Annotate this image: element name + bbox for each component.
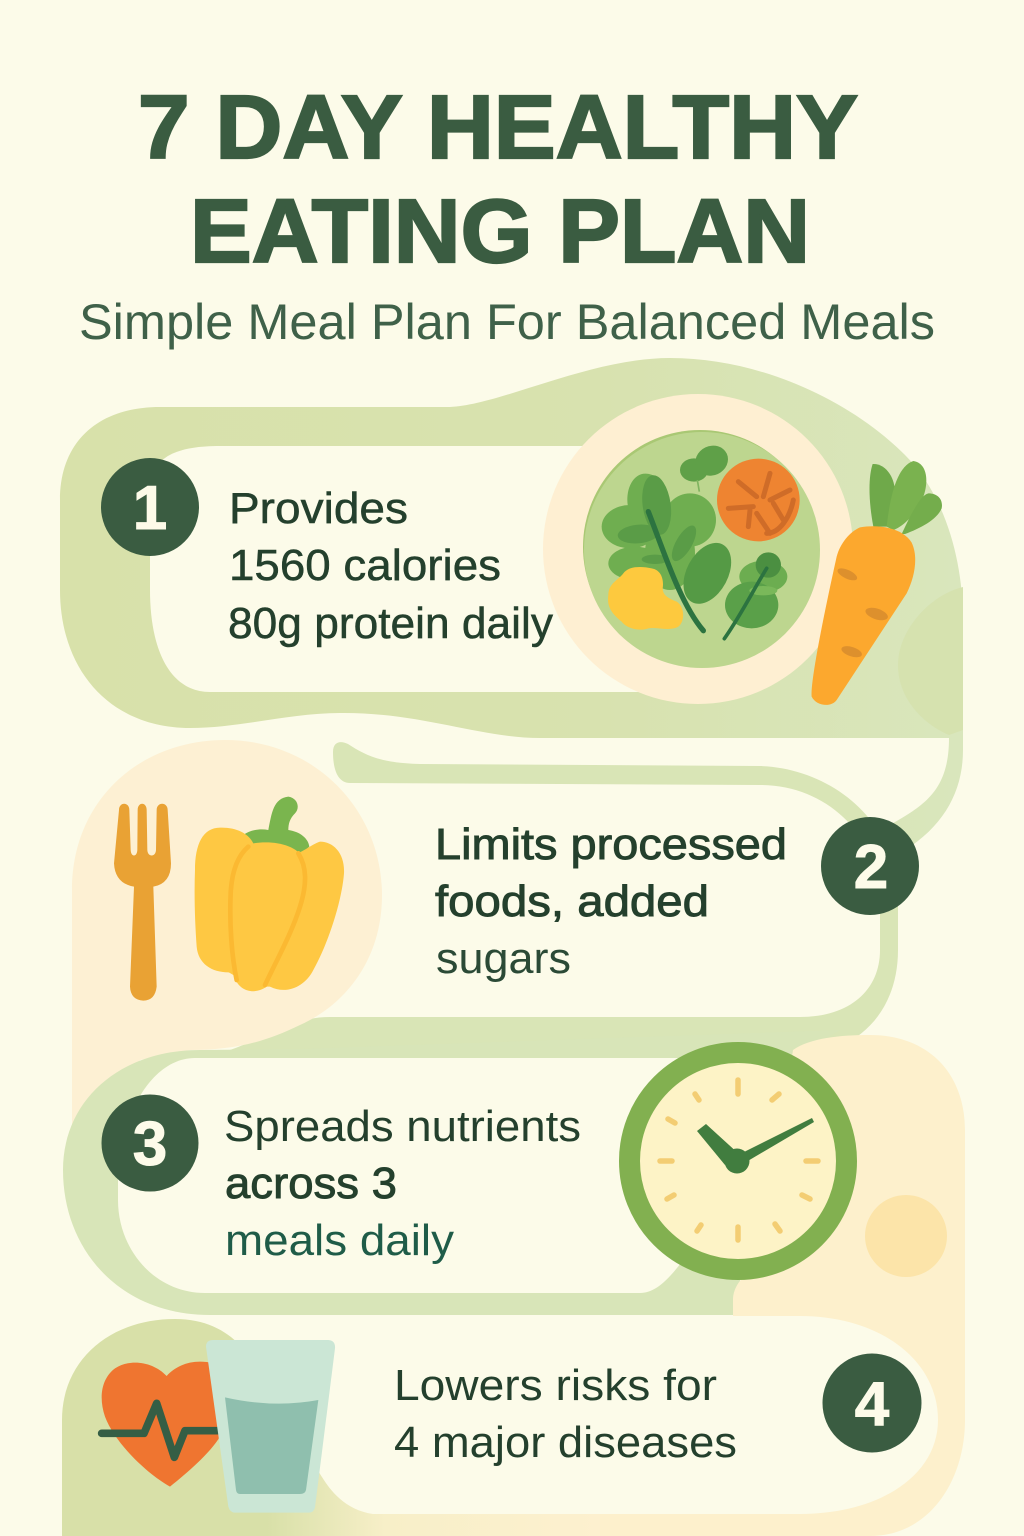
title: EATING PLAN <box>190 182 810 282</box>
decorative circle <box>865 1195 947 1277</box>
subtitle: Simple Meal Plan For Balanced Meals <box>79 294 935 350</box>
green blob lower left <box>62 1319 600 1536</box>
badge 3: 3 <box>133 1110 167 1179</box>
icon: yellow bell pepper <box>195 797 344 991</box>
badge 1: 1 <box>133 474 167 543</box>
icon: clock <box>630 1052 846 1270</box>
item 4 text: Lowers risks for <box>394 1361 717 1410</box>
badge 4 <box>822 1354 922 1452</box>
item 2 text: sugars <box>436 934 571 983</box>
badge 2: 2 <box>854 833 888 902</box>
peach blob behind fork and pepper <box>72 740 382 1170</box>
title <box>138 78 858 282</box>
icon: carrot <box>812 461 942 705</box>
ribbon path 1 <box>60 358 963 850</box>
item 3 text <box>224 1102 581 1265</box>
title: 7 DAY HEALTHY <box>138 78 858 178</box>
item 1 <box>101 394 942 705</box>
peach blob behind clock <box>590 1035 965 1536</box>
item 1 text: 80g protein daily <box>228 599 553 648</box>
item 1 text <box>228 484 553 648</box>
item 4 text <box>394 1361 737 1467</box>
yellow squash <box>608 567 683 630</box>
item 2 text: Limits processed <box>435 820 787 869</box>
item 1 text: 1560 calories <box>229 541 501 590</box>
ribbon path 3 <box>63 1030 840 1315</box>
item 4 <box>102 1340 921 1513</box>
white pill 4 <box>200 1316 938 1514</box>
item 2 text: foods, added <box>435 877 709 926</box>
icon: fork <box>114 804 171 1001</box>
item 2 text <box>435 820 787 983</box>
item 3 text: across 3 <box>225 1159 397 1208</box>
item 2 <box>114 797 919 1001</box>
item 3 text: meals daily <box>225 1216 454 1265</box>
ribbon path 2 <box>200 742 898 1058</box>
item 3 text: Spreads nutrients <box>224 1102 581 1151</box>
item 4 text: 4 major diseases <box>394 1418 737 1467</box>
item 1 text: Provides <box>229 484 408 533</box>
icon: heart with pulse <box>102 1362 220 1487</box>
leaves <box>602 440 787 639</box>
badge 2 <box>821 817 919 915</box>
badge 3 <box>102 1094 198 1192</box>
icon: salad plate <box>543 394 853 704</box>
tomato <box>717 459 800 541</box>
badge 4: 4 <box>855 1370 890 1439</box>
icon: glass of water <box>206 1340 335 1513</box>
badge 1 <box>101 458 199 556</box>
item 3 <box>102 1052 846 1270</box>
